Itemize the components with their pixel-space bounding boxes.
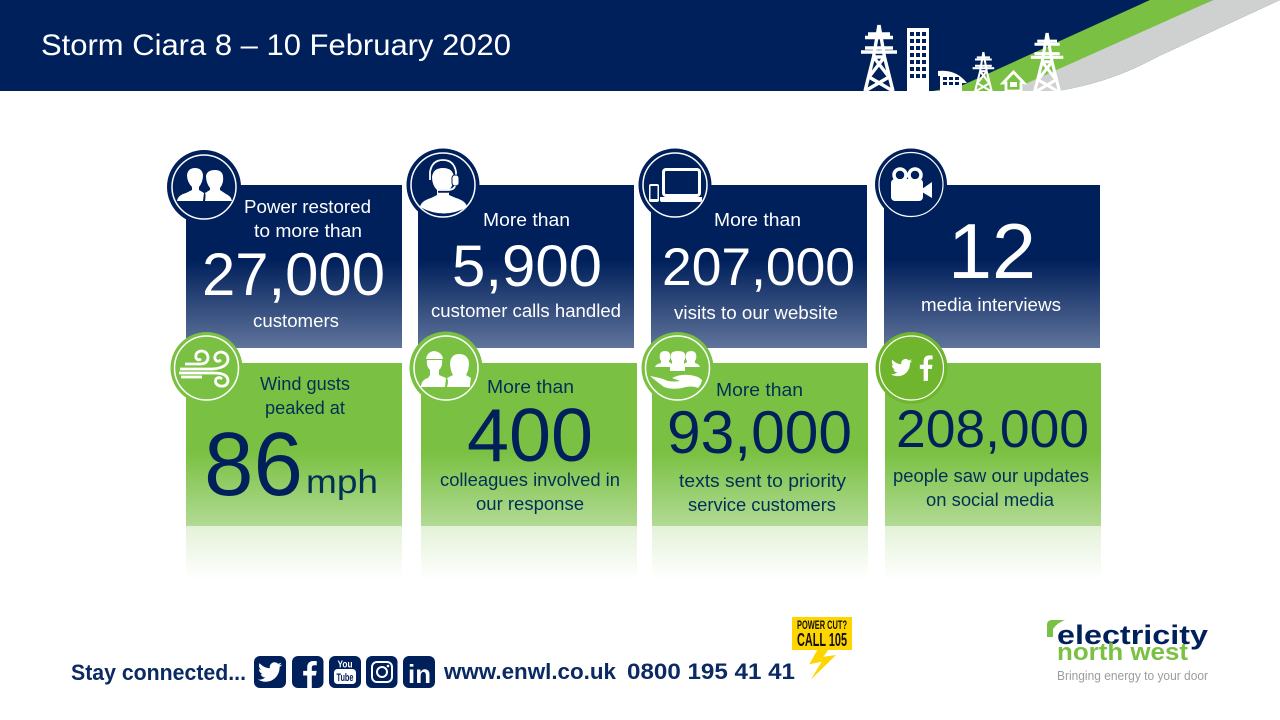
logo: electricity north west: Bringing energy to your door <box>1057 669 1208 683</box>
footer contact bar <box>71 656 795 689</box>
logo: electricity north west: electricity <box>1057 620 1208 650</box>
icon: twitter and facebook <box>876 332 948 404</box>
icon: worker and colleague <box>410 332 482 404</box>
number: 27,000: 27,000 <box>202 241 385 308</box>
icon: youtube: You <box>338 660 352 670</box>
text: more than: More than <box>716 380 803 400</box>
text: on social media: on social media <box>926 490 1055 510</box>
text: media interviews: media interviews <box>921 295 1061 315</box>
icon: youtube <box>329 656 361 688</box>
panel: wind gusts <box>170 332 402 580</box>
icon: hand holding people <box>642 332 714 404</box>
panel: customer calls <box>406 148 634 348</box>
number: 86: 86 <box>204 415 303 515</box>
text: more than: More than <box>714 210 801 230</box>
icon: wind <box>170 332 242 404</box>
number: 93,000: 93,000 <box>667 399 852 466</box>
icon: laptop and phone <box>638 148 712 222</box>
text: customer calls handled: customer calls handled <box>431 301 621 321</box>
panel: media interviews <box>875 148 1100 348</box>
panel: power restored <box>167 150 402 348</box>
panel: texts sent <box>642 332 868 580</box>
text: to more than: to more than <box>254 221 362 241</box>
logo: electricity north west <box>1047 620 1208 683</box>
text: website: www.enwl.co.uk <box>443 659 617 684</box>
icon: two people <box>167 150 241 224</box>
icon: skyline of pylons and buildings <box>861 25 1063 92</box>
text: visits to our website: visits to our website <box>674 303 838 323</box>
icon: linkedin: in <box>408 659 431 689</box>
header banner <box>0 0 1280 92</box>
text: service customers: service customers <box>688 495 836 515</box>
text: texts sent to priority: texts sent to priority <box>679 471 846 491</box>
icon: call handler headset <box>406 148 480 222</box>
icon: twitter <box>254 656 286 688</box>
text: power restored: Power restored <box>244 197 371 217</box>
title: Storm Ciara 8 – 10 February 2020 <box>41 29 511 62</box>
text: stay connected: Stay connected... <box>71 660 246 685</box>
logo: electricity north west: north west <box>1057 639 1188 666</box>
text: our response: our response <box>476 494 584 514</box>
number: 5,900: 5,900 <box>452 234 602 299</box>
panel: social media <box>876 332 1101 580</box>
callout: power cut call 105: CALL 105 <box>797 630 847 650</box>
callout: power cut call 105: POWER CUT? <box>797 618 847 632</box>
text: colleagues involved in: colleagues involved in <box>440 470 620 490</box>
icon: linkedin <box>403 656 435 689</box>
number: 12: 12 <box>948 207 1036 295</box>
text: phone number: 0800 195 41 41 <box>627 659 795 684</box>
panel: website visits <box>638 148 867 348</box>
icon: youtube: Tube <box>336 672 354 684</box>
text: wind gusts: Wind gusts <box>260 374 350 394</box>
text: mph: mph <box>306 463 378 500</box>
panel: colleagues <box>410 332 637 580</box>
icon: facebook <box>292 656 324 688</box>
text: customers: customers <box>253 311 339 331</box>
icon: video camera <box>875 148 947 220</box>
callout: power cut call 105 <box>792 617 852 680</box>
text: more than: More than <box>483 210 570 230</box>
number: 207,000: 207,000 <box>662 238 855 297</box>
icon: instagram <box>366 656 398 688</box>
number: 400: 400 <box>467 393 593 477</box>
number: 208,000: 208,000 <box>896 400 1089 459</box>
text: more than: More than <box>487 377 574 397</box>
text: peaked at: peaked at <box>265 398 345 418</box>
text: people saw our updates: people saw our updates <box>893 466 1089 486</box>
